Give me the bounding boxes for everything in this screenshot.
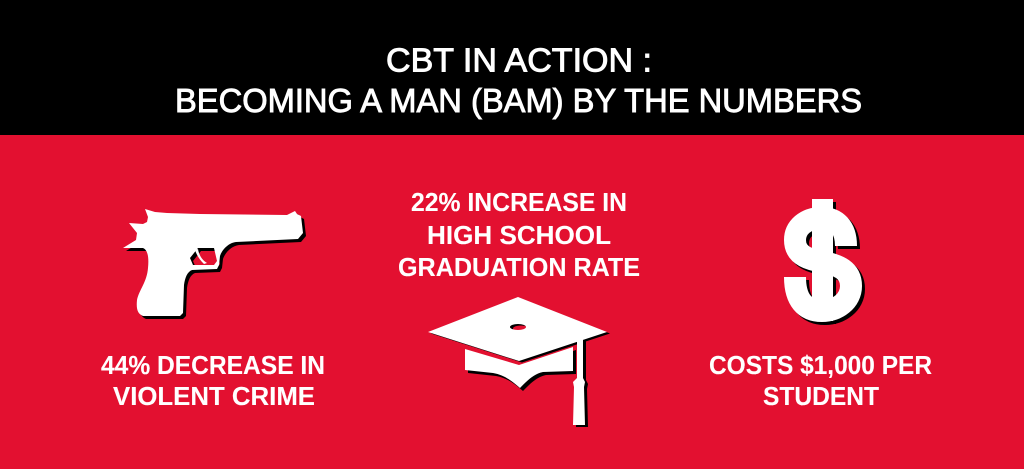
stat text: violent crime: VIOLENT CRIME (113, 381, 315, 411)
title: CBT IN ACTION : (386, 42, 652, 78)
icon: gun (123, 209, 306, 319)
stat text: graduation rate (398, 187, 640, 282)
background: red panel (0, 135, 1024, 469)
stat text: graduation rate: HIGH SCHOOL (427, 220, 611, 250)
stat text: graduation rate: 22% INCREASE IN (411, 187, 627, 217)
header band (0, 0, 1024, 135)
title (175, 42, 862, 119)
stat text: graduation rate: GRADUATION RATE (398, 252, 640, 282)
stat text: violent crime (101, 350, 325, 411)
stat text: cost per student (709, 350, 932, 411)
stat text: violent crime: 44% DECREASE IN (101, 350, 325, 380)
stat text: cost per student: COSTS $1,000 PER (709, 350, 932, 380)
title: BECOMING A MAN (BAM) BY THE NUMBERS (175, 82, 862, 119)
icon: graduation cap (428, 297, 610, 427)
icon: dollar sign (795, 199, 854, 324)
stat text: cost per student: STUDENT (763, 381, 879, 411)
